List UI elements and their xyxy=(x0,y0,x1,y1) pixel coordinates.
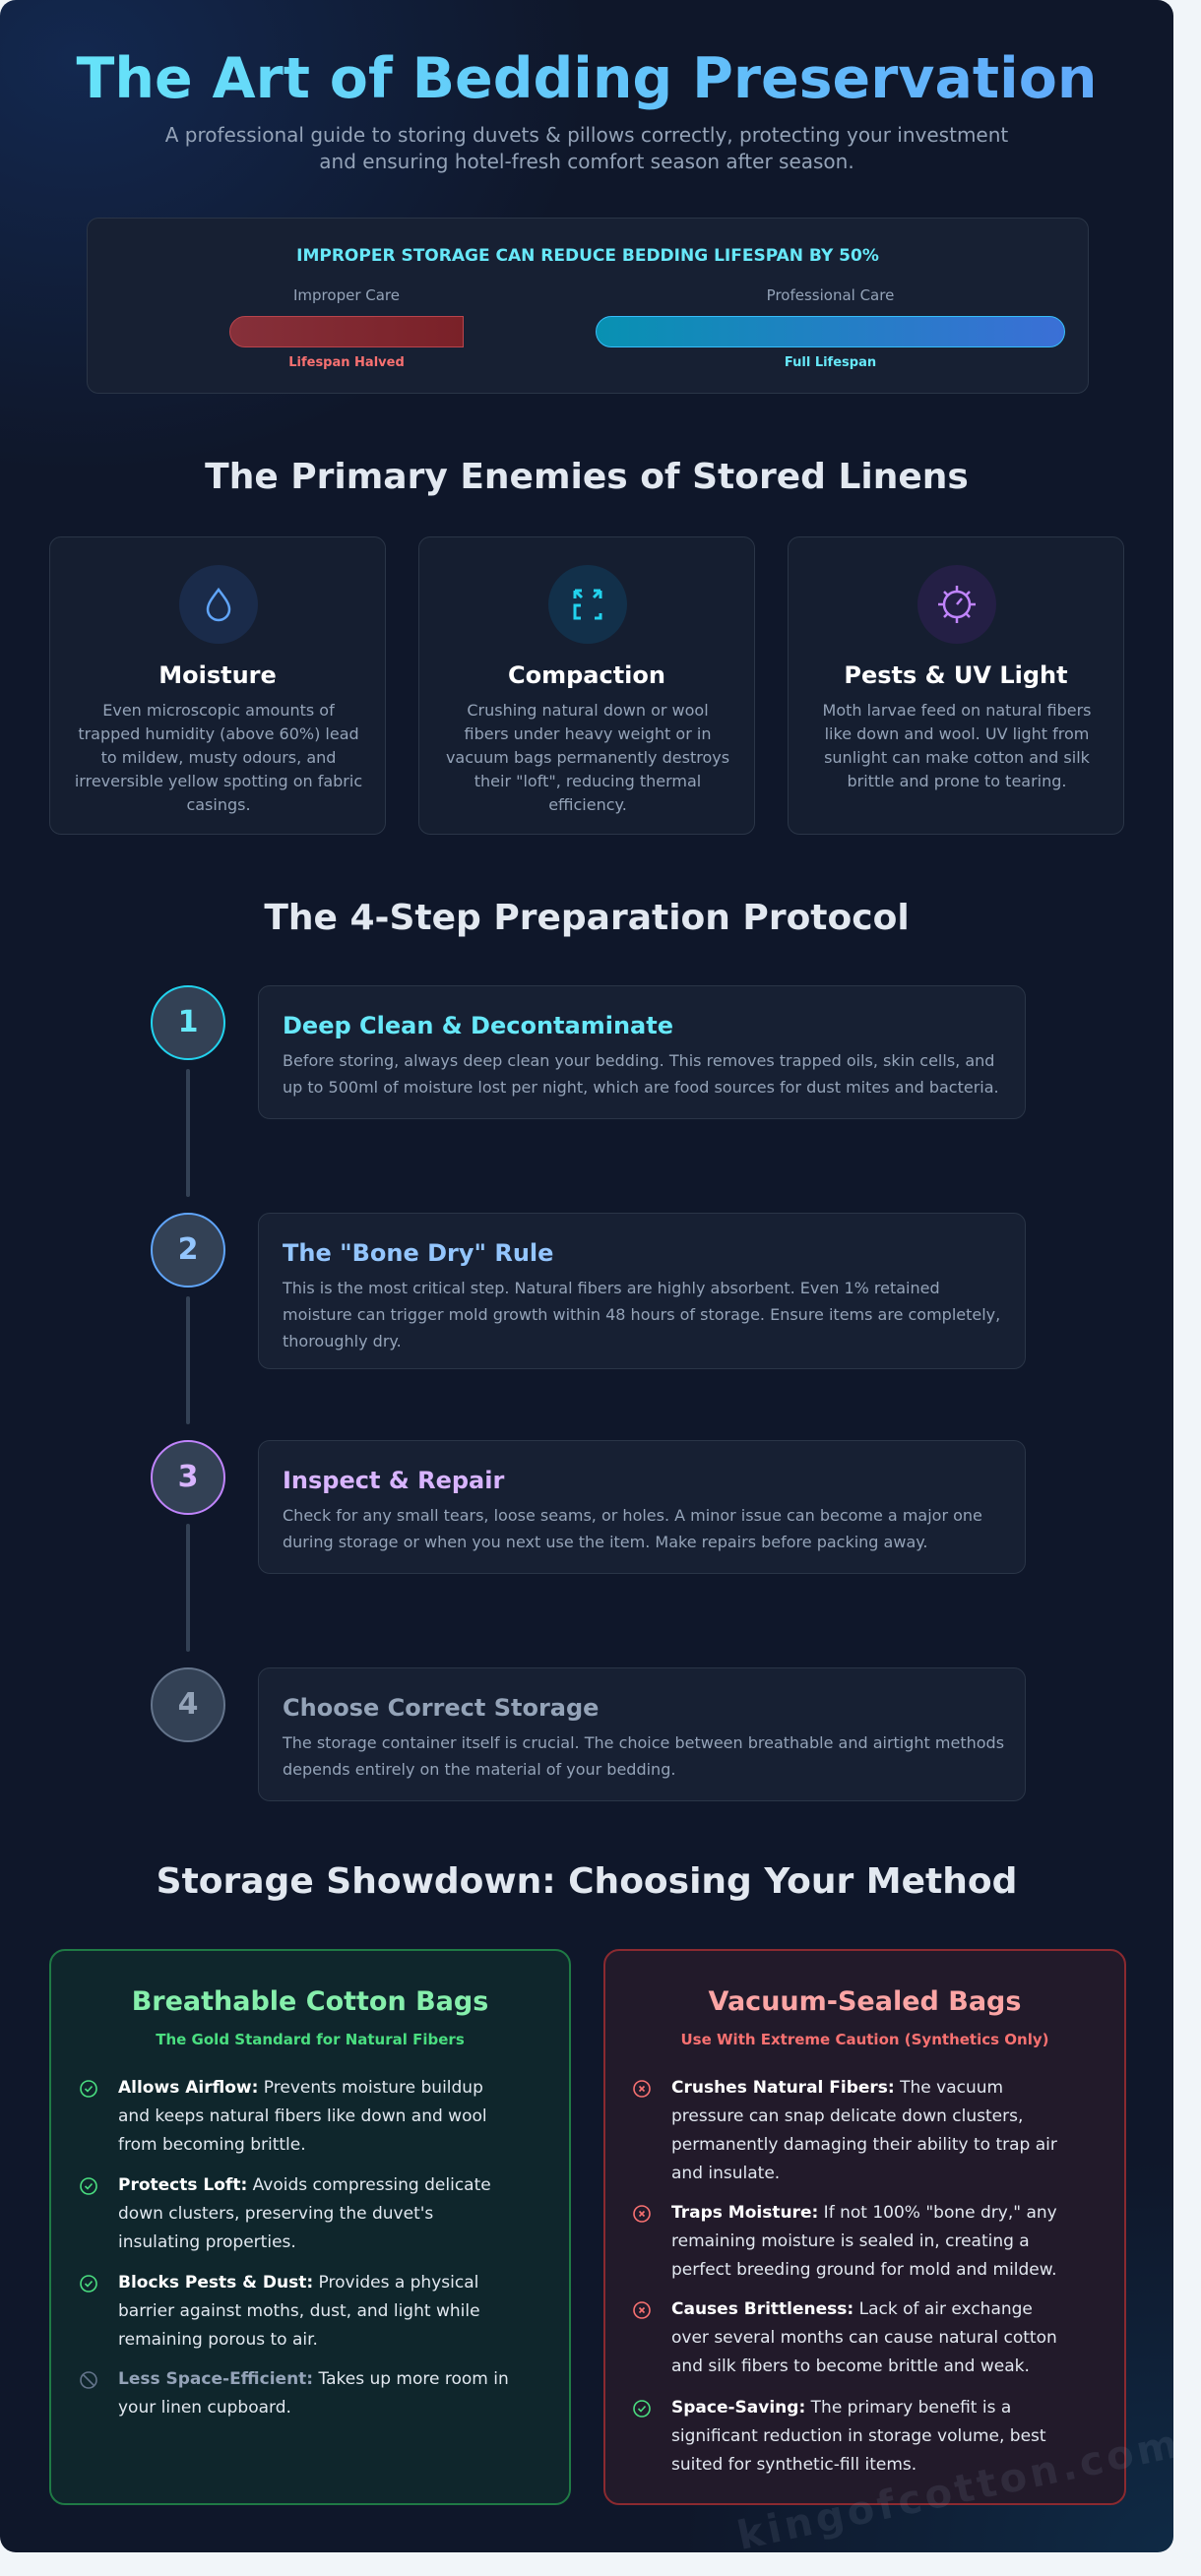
step 1 box: Before storing, always deep clean your bedding. This removes trapped oils, skin cells, and up to 500ml of moisture lost per night, which are food sources for dust mites and bacteria. xyxy=(283,1051,999,1097)
bar: improper care: Improper Care xyxy=(293,286,400,304)
stat heading: IMPROPER STORAGE CAN REDUCE BEDDING LIFESPAN BY 50% xyxy=(296,246,879,266)
step 3 number xyxy=(151,1440,225,1515)
bar: professional care: Professional Care xyxy=(767,286,894,304)
step 4 number: 4 xyxy=(178,1687,198,1722)
step 3 box: Inspect & Repair xyxy=(283,1467,504,1494)
item: space: Less Space-Efficient: Takes up more room in your linen cupboard. xyxy=(118,2369,509,2418)
step 4 box: Choose Correct Storage xyxy=(283,1694,599,1722)
panel: cotton bags: Breathable Cotton Bags xyxy=(132,1986,488,2017)
item: loft: Protects Loft: Avoids compressing delicate down clusters, preserving the duvet's insulating properties. xyxy=(118,2175,491,2252)
panel: compaction: Compaction xyxy=(508,661,665,689)
bar: improper care: Lifespan Halved xyxy=(288,355,405,370)
subtitle: A professional guide to storing duvets & pillows correctly, protecting your investment xyxy=(165,123,1008,147)
step 4 box xyxy=(258,1667,1026,1801)
panel: compaction: Crushing natural down or wool fibers under heavy weight or in vacuum bags permanently destroys their "loft", reducing thermal efficiency. xyxy=(446,701,729,814)
panel: moisture xyxy=(49,536,386,835)
step 3 number: 3 xyxy=(178,1460,198,1494)
step 4 number xyxy=(151,1667,225,1742)
bar: professional care: Full Lifespan xyxy=(785,355,876,370)
icon: compress xyxy=(548,565,627,644)
panel: compaction xyxy=(418,536,755,835)
step 2 number: 2 xyxy=(178,1232,198,1267)
heading: showdown: Storage Showdown: Choosing Your Method xyxy=(157,1861,1017,1902)
bar: professional care xyxy=(596,286,1065,370)
connector lines xyxy=(186,1069,190,1197)
item: space saving: Space-Saving: The primary benefit is a significant reduction in storage volume, best suited for synthetic-fill items. xyxy=(671,2398,1046,2475)
item: moisture: Traps Moisture: If not 100% "bone dry," any remaining moisture is sealed in, creating a perfect breeding ground for mold and mildew. xyxy=(671,2203,1057,2280)
step 2 box xyxy=(258,1213,1026,1369)
panel: lifespan stat xyxy=(87,218,1089,394)
panel: pests: Pests & UV Light xyxy=(844,661,1068,689)
panel: moisture: Even microscopic amounts of trapped humidity (above 60%) lead to mildew, musty odours, and irreversible yellow spotting on fabric casings. xyxy=(75,701,362,814)
step 3 box: Check for any small tears, loose seams, or holes. A minor issue can become a major one during storage or when you next use the item. Make repairs before packing away. xyxy=(283,1506,982,1551)
panel: cotton bags: The Gold Standard for Natural Fibers xyxy=(156,2031,465,2048)
heading: enemies: The Primary Enemies of Stored Linens xyxy=(205,457,969,497)
panel: vacuum bags: Vacuum-Sealed Bags xyxy=(709,1986,1021,2017)
icon: pest/sun xyxy=(917,565,996,644)
step 4 box: The storage container itself is crucial. The choice between breathable and airtight methods depends entirely on the material of your bedding. xyxy=(283,1733,1004,1779)
step 2 box: The "Bone Dry" Rule xyxy=(283,1239,553,1267)
panel: cotton bags xyxy=(49,1949,571,2505)
subtitle: and ensuring hotel-fresh comfort season after season. xyxy=(319,150,854,173)
item: brittleness: Causes Brittleness: Lack of air exchange over several months can cause natural cotton and silk fibers to become brittle and weak. xyxy=(671,2299,1057,2376)
bar: improper care xyxy=(229,286,464,370)
title: The Art of Bedding Preservation xyxy=(77,46,1097,111)
subtitle xyxy=(165,123,1008,173)
step 1 box: Deep Clean & Decontaminate xyxy=(283,1012,673,1039)
step 3 box xyxy=(258,1440,1026,1574)
panel: vacuum bags xyxy=(603,1949,1126,2505)
panel: moisture: Moisture xyxy=(158,661,277,689)
panel: pests xyxy=(788,536,1124,835)
step 2 box: This is the most critical step. Natural fibers are highly absorbent. Even 1% retained moisture can trigger mold growth within 48 hours of storage. Ensure items are completely, thoroughly dry. xyxy=(283,1279,1000,1351)
panel: vacuum bags: Use With Extreme Caution (Synthetics Only) xyxy=(681,2031,1048,2048)
item: crushes: Crushes Natural Fibers: The vacuum pressure can snap delicate down clusters, permanently damaging their ability to trap air and insulate. xyxy=(671,2078,1057,2183)
icon: water drop xyxy=(179,565,258,644)
step 1 number: 1 xyxy=(178,1005,198,1039)
step 1 box xyxy=(258,985,1026,1119)
item: pests: Blocks Pests & Dust: Provides a physical barrier against moths, dust, and light while remaining porous to air. xyxy=(118,2273,480,2350)
item: airflow: Allows Airflow: Prevents moisture buildup and keeps natural fibers like down and wool from becoming brittle. xyxy=(118,2078,487,2155)
heading: protocol: The 4-Step Preparation Protocol xyxy=(264,898,910,938)
step 2 number xyxy=(151,1213,225,1288)
panel: pests: Moth larvae feed on natural fibers like down and wool. UV light from sunlight can make cotton and silk brittle and prone to tearing. xyxy=(823,701,1091,790)
step 1 number xyxy=(151,985,225,1060)
